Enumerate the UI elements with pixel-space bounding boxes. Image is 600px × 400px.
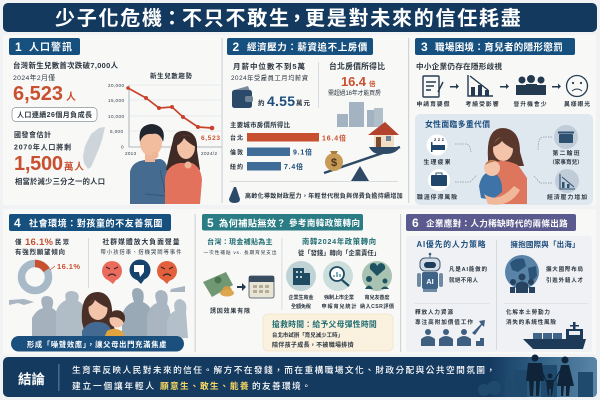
chart: price to income bars: 16.4倍: [322, 134, 346, 142]
heading: conclusion: 結論: [18, 371, 46, 387]
heading: why subsidies fail: [202, 214, 363, 230]
chart: price to income bars: 倫敦: [230, 148, 243, 156]
icons: Korean corporate policies: 強制上市企業: [324, 294, 354, 301]
heading: population alert: 人口警訊: [29, 40, 72, 54]
heading: social environment: 4: [14, 216, 21, 230]
heading: workplace dilemma: 職場困境：育兒者的隱形懲罰: [435, 42, 563, 54]
stat: 16.1 percent: 16.1%: [25, 237, 54, 248]
stat: Taipei price to income: 台北房價所得比: [329, 61, 385, 71]
callout: multiple costs for women: （家事育兒）: [549, 158, 583, 166]
text: South Korea policy shift: [298, 237, 380, 257]
flow: discrimination steps: 晉升機會少: [514, 100, 547, 108]
text: Taiwan cash subsidies: 一次性補貼 vs. 長期育兒支出: [204, 249, 277, 256]
icon: globe with people: [505, 255, 539, 293]
icon: workers with rising arrow: [421, 320, 485, 346]
chart: donut 16.1 percent: 16.1%: [57, 262, 80, 271]
panel: workplace dilemma: [415, 38, 593, 205]
panel: population alert: [9, 38, 222, 204]
text: anything AI can do: 凡是AI能做的: [449, 265, 487, 273]
icons: Korean corporate policies: 全額免稅: [291, 303, 311, 310]
text: national development council estimate: 2070年人口將剩: [14, 142, 71, 152]
icon: sleep fatigue: zzz: [434, 137, 445, 142]
stat: 4.55 ten-thousand: [258, 93, 310, 109]
text: Taiwan cash subsidies: [204, 237, 277, 256]
text: expand international presence: 引進外籍人才: [546, 276, 583, 284]
chart: birth trend line: 新生兒數趨勢: [150, 71, 192, 80]
chart: price to income bars: 9.1倍: [293, 148, 312, 156]
flow: discrimination steps: 異樣眼光: [564, 100, 590, 108]
title: 不只不敢生: [182, 7, 291, 30]
text: limited incentive: 誘因效果有限: [210, 307, 250, 315]
callout: multiple costs for women: [415, 114, 593, 205]
text: expand international presence: 擴大國際布局: [546, 265, 583, 273]
text: going global: 擁抱國際與「出海」: [510, 239, 580, 249]
note: fiscal burden: 高齡化導致財政壓力，年輕世代稅負與保費負擔持續增加: [245, 192, 403, 200]
icon: AI robot: [417, 253, 443, 292]
pill: 26 months of negative growth: [12, 108, 97, 122]
text: South Korea policy shift: 南韓2024年政策轉向: [302, 237, 376, 246]
title: 更是對未來的信任耗盡: [305, 7, 522, 30]
illustration: worried couple: [130, 124, 202, 204]
heading: social environment: 社會環境：對孩童的不友善氛圍: [29, 218, 163, 228]
heading: corporate response: 企業應對：人力稀缺時代的兩條出路: [426, 218, 568, 228]
chart: birth trend line: 2024/2: [201, 151, 217, 156]
stat: 16.1 percent: [15, 237, 70, 256]
callout: multiple costs for women: 第二輪班: [552, 149, 580, 157]
text: one third reduction: 相當於減少三分之一的人口: [15, 177, 105, 186]
illustration: mother holding baby: [479, 128, 527, 205]
title: [3, 3, 597, 32]
chart: price to income bars: 7.4倍: [284, 162, 303, 171]
text: Taiwan cash subsidies: 台灣：現金補貼為主: [207, 237, 273, 246]
chart: birth trend line: [108, 71, 222, 156]
heading: workplace dilemma: [415, 38, 575, 55]
stat: Taipei price to income: [328, 61, 385, 97]
stat: 15 million people: 萬人: [64, 161, 84, 173]
text: February 2024 only: 2024年2月僅: [13, 73, 55, 82]
callout: buying time for parents: [263, 314, 393, 351]
panel: conclusion: [3, 354, 597, 397]
callout: buying time for parents: 台北市試辦「育兒減少工時」: [272, 331, 343, 339]
panel: corporate response: [406, 214, 592, 352]
text: resolve domestic labour decline: 化解本土勞動力: [506, 308, 550, 316]
icon: money to calendar: [203, 272, 274, 298]
heading: corporate response: [406, 214, 576, 231]
chart: price to income bars: 紐約: [230, 163, 243, 171]
panel: economic pressure: [227, 38, 403, 203]
icons: Korean corporate policies: 育兒友善度: [364, 294, 390, 301]
icon: briefcase: [428, 169, 450, 191]
pill: 26 months of negative growth: 人口連續26個月負成長: [17, 110, 92, 119]
callout: buying time for parents: 搶救時間：給予父母彈性時間: [272, 319, 377, 329]
chart: birth trend line: 10,000: [108, 114, 124, 119]
chart: price to income bars: 台北: [230, 134, 243, 142]
stat: 4.55 ten-thousand: 萬元: [296, 98, 310, 107]
callout: multiple costs for women: 女性面臨多重代價: [425, 119, 490, 129]
illustration: family and city silhouette: [478, 354, 597, 397]
callout: multiple costs for women: 職涯停滯風險: [417, 193, 457, 201]
stat: 6,523 births: 人: [66, 91, 76, 103]
icon: container ship: [523, 322, 586, 349]
text: conclusion body: 的友善環境。: [252, 380, 312, 391]
chart: birth trend line: 2013: [125, 151, 136, 156]
callout: multiple costs for women: 經濟壓力增加: [547, 193, 587, 201]
chart: birth trend line: 15,000: [108, 98, 124, 103]
stat: 16.1 percent: 民眾: [55, 238, 70, 246]
text: anything AI can do: [449, 265, 487, 284]
stat: Taipei price to income: 16.4: [341, 74, 367, 89]
title: 少子化危機: [55, 6, 164, 30]
chart: birth trend line: 5,000: [110, 129, 123, 134]
heading: why subsidies fail: 5: [207, 216, 214, 230]
chart: price to income bars: [230, 120, 346, 171]
illustration: scale with house and money bag: [324, 122, 400, 181]
icons: Korean corporate policies: 申報育兒統計: [322, 303, 356, 310]
heading: economic pressure: [227, 38, 373, 55]
panel: why subsidies fail: [202, 214, 394, 351]
icon: sleep fatigue: [426, 134, 448, 156]
heading: population alert: [9, 38, 80, 55]
text: median salary: 2024年受雇員工月均薪資: [231, 73, 309, 82]
text: median salary: 月薪中位數不到5萬: [233, 61, 306, 71]
chart: birth trend line: 20,000: [108, 83, 124, 88]
text: national development council estimate: 國發會估計: [14, 130, 51, 139]
heading: workplace dilemma: 3: [421, 40, 428, 54]
illustration: scale with house and money bag: $: [331, 157, 337, 169]
stat: Taipei price to income: 倍: [369, 79, 376, 88]
text: SMB discrimination: 中小企業仍存在隱形歧視: [416, 61, 502, 71]
heading: economic pressure: 經濟壓力：薪資追不上房價: [247, 42, 368, 54]
stat: 16.1 percent: 僅: [15, 237, 22, 246]
chart: birth trend line: 6,523: [201, 135, 220, 142]
stat: 15 million people: 1,500: [14, 153, 63, 175]
icon: city buildings: [337, 102, 383, 127]
icon: Taiwan map: [83, 127, 105, 169]
note: fiscal burden: [229, 187, 403, 203]
text: resolve domestic labour decline: [506, 308, 556, 326]
text: resolve domestic labour decline: 消失的系統性風險: [506, 318, 556, 326]
text: conclusion body: [72, 364, 497, 391]
heading: why subsidies fail: 參考南韓政策轉向: [289, 218, 360, 228]
icons: Korean corporate policies: 納入CSR評價: [360, 303, 394, 310]
icon: AI robot: AI: [426, 277, 434, 286]
chart: birth trend line: 0: [121, 144, 124, 150]
text: free up human resources: 釋放人力資源: [415, 308, 453, 316]
text: free up human resources: 專注高附加價值工作: [415, 318, 473, 326]
text: free up human resources: [415, 308, 473, 326]
title: ，: [287, 8, 309, 30]
text: national development council estimate: [14, 130, 71, 152]
stat: 15 million people: [14, 153, 84, 175]
text: conclusion body: 願意生、敢生、能養: [160, 380, 250, 391]
flow: discrimination steps: [416, 75, 590, 108]
chart: price to income bars: 主要城市房價所得比: [230, 120, 291, 129]
heading: social environment: [9, 214, 171, 231]
heading: economic pressure: 2: [232, 40, 240, 54]
banner: noise effect: 形成「噪聲效應」，讓父母出門充滿焦慮: [27, 340, 167, 349]
heading: population alert: 1: [15, 40, 22, 54]
icon: falling chart: [555, 169, 579, 193]
icons: Korean corporate policies: 企業生育金: [288, 294, 314, 301]
callout: multiple costs for women: 生理疲累: [424, 158, 451, 166]
stat: 4.55 ten-thousand: 約: [258, 98, 265, 107]
text: conclusion body: 建立一個讓年輕人: [72, 380, 156, 391]
text: social media amplification: 社群媒體放大負面聲量: [102, 237, 180, 246]
icons: Korean corporate policies: [286, 261, 394, 310]
heading: why subsidies fail: 為何補貼無效？: [219, 218, 286, 228]
stat: 6,523 births: 6,523: [13, 83, 63, 105]
text: social media amplification: 帶小孩搭車、搭機哭鬧等事件: [100, 248, 182, 256]
callout: buying time for parents: 陪伴孩子成長，不被職場排擠: [272, 341, 354, 349]
text: births fell below 7000: 台灣新生兒數首次跌破7,000人: [13, 61, 119, 70]
flow: discrimination steps: 申請育嬰假: [416, 100, 450, 108]
heading: corporate response: 6: [412, 216, 419, 230]
text: median salary: [231, 61, 309, 82]
text: social media amplification: [100, 237, 182, 256]
illustration: judging crowd with mother and child: [9, 286, 188, 338]
stat: 16.1 percent: 有強烈願望傾向: [15, 247, 65, 256]
stat: 4.55 ten-thousand: 4.55: [267, 93, 295, 109]
flow: discrimination steps: 考績受影響: [466, 100, 499, 108]
text: conclusion body: 生育率反映人民對未來的信任。解方不在發錢，而在重構職場文化、財政分配與公共空間氛圍，: [72, 364, 497, 375]
banner: noise effect: [11, 336, 184, 352]
text: expand international presence: [546, 265, 583, 284]
icon: pot: [554, 125, 578, 149]
stat: Taipei price to income: 需超過16年才能買房: [328, 89, 381, 97]
title: ：: [162, 8, 184, 30]
text: AI first strategy: AI優先的人力策略: [416, 239, 486, 249]
text: anything AI can do: 就絕不用人: [449, 276, 478, 284]
panel: social environment: [9, 214, 188, 352]
text: South Korea policy shift: 從「發錢」轉向「企業責任」: [298, 248, 380, 257]
chart: donut 16.1 percent: [22, 262, 80, 290]
icon: wallet: [232, 86, 253, 108]
icons: negative reactions: [102, 260, 177, 284]
